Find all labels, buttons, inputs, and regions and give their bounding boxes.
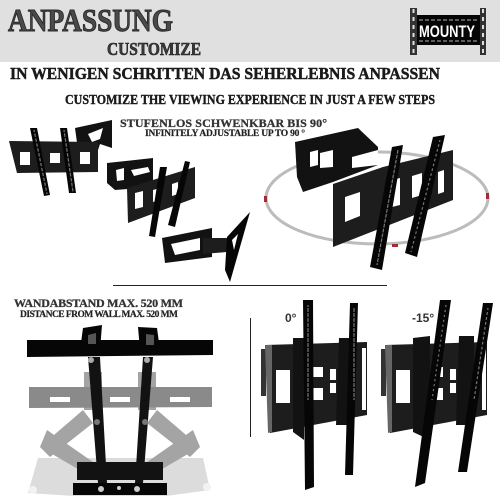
title: Anpassung: ANPASSUNG bbox=[8, 2, 173, 38]
chart: swivel ring with large mount bbox=[264, 128, 489, 270]
layer: mid plate bbox=[29, 387, 212, 408]
panel: header band bbox=[0, 0, 500, 62]
product: tilt minus 15 degrees bbox=[381, 300, 493, 487]
logo: Mounty: MOUNTY bbox=[419, 22, 475, 41]
logo: Mounty bbox=[410, 8, 486, 55]
layer: front plate bbox=[27, 340, 213, 357]
subtitle: Customize: CUSTOMIZE bbox=[107, 39, 201, 59]
product: mount extended view bbox=[107, 158, 195, 237]
layer: black arms bbox=[88, 357, 153, 483]
caption: wall distance English: DISTANCE FROM WALL MAX. 520 MM bbox=[20, 310, 178, 320]
caption: wall distance German: WANDABSTAND MAX. 520 MM bbox=[14, 296, 183, 310]
divider: vertical bbox=[250, 318, 252, 437]
heading: German headline: IN WENIGEN SCHRITTEN DAS SEHERLEBNIS ANPASSEN bbox=[10, 64, 440, 83]
caption: swivel German: STUFENLOS SCHWENKBAR BIS 90° bbox=[120, 116, 327, 130]
label: minus 15 degrees: -15° bbox=[412, 311, 434, 325]
product: mount front view bbox=[9, 120, 112, 196]
product: extension sequence bbox=[27, 325, 213, 496]
product: mount side view bbox=[162, 212, 250, 282]
product: tilt 0 degrees bbox=[261, 300, 367, 490]
caption: swivel English: INFINITELY ADJUSTABLE UP TO 90 ° bbox=[145, 128, 305, 139]
marker: swivel arrows bbox=[264, 193, 489, 247]
layer: base bbox=[77, 462, 163, 480]
layer: mid arms bbox=[40, 372, 200, 472]
product: large mount bbox=[295, 128, 453, 270]
divider: horizontal bbox=[113, 284, 387, 286]
heading: English headline: CUSTOMIZE THE VIEWING EXPERIENCE IN JUST A FEW STEPS bbox=[65, 92, 435, 107]
label: zero degrees: 0° bbox=[285, 311, 297, 325]
layer: retracted plate bbox=[28, 458, 210, 496]
